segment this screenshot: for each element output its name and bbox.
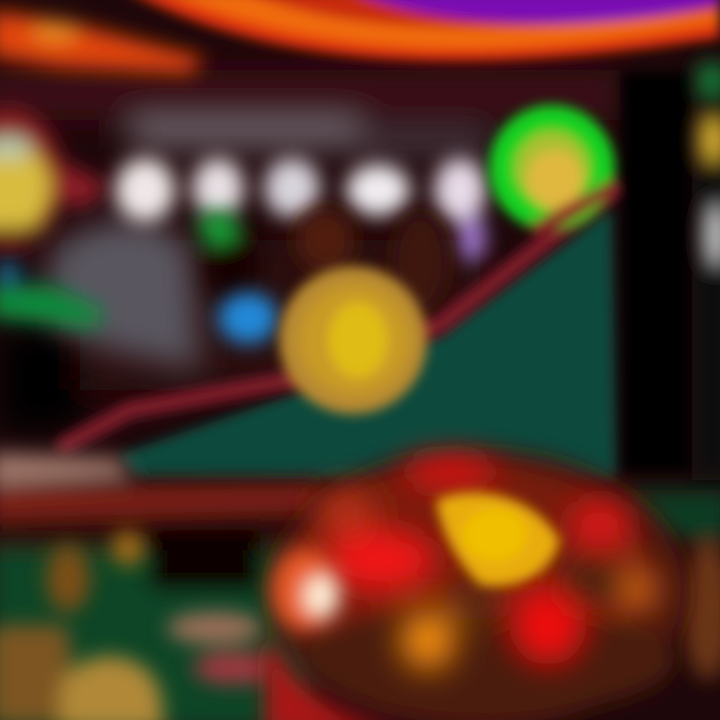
lower-left table [0,452,320,720]
chip stacks [0,530,277,720]
right black column [622,72,690,472]
row of white lights [115,158,486,262]
far right panel with lights [692,60,720,480]
area chart: green rising wedge [118,208,616,482]
right green floor [620,490,720,680]
wheel red segments [315,456,658,670]
red trend line [65,190,612,445]
top arc: orange and purple ceiling [125,0,720,61]
top-left orange band [0,10,205,74]
wheel white highlight [271,548,340,632]
green ring gauge [502,118,616,240]
gold coin [279,266,427,414]
wheel base [265,450,688,720]
blue light [218,292,278,344]
upper room backdrop [0,70,620,430]
grey machine [45,221,200,370]
left wheel [0,108,110,252]
green glow left [0,262,105,328]
roulette wheel [265,450,688,720]
wheel gold center [436,493,560,586]
dark figures below lights [198,208,448,312]
